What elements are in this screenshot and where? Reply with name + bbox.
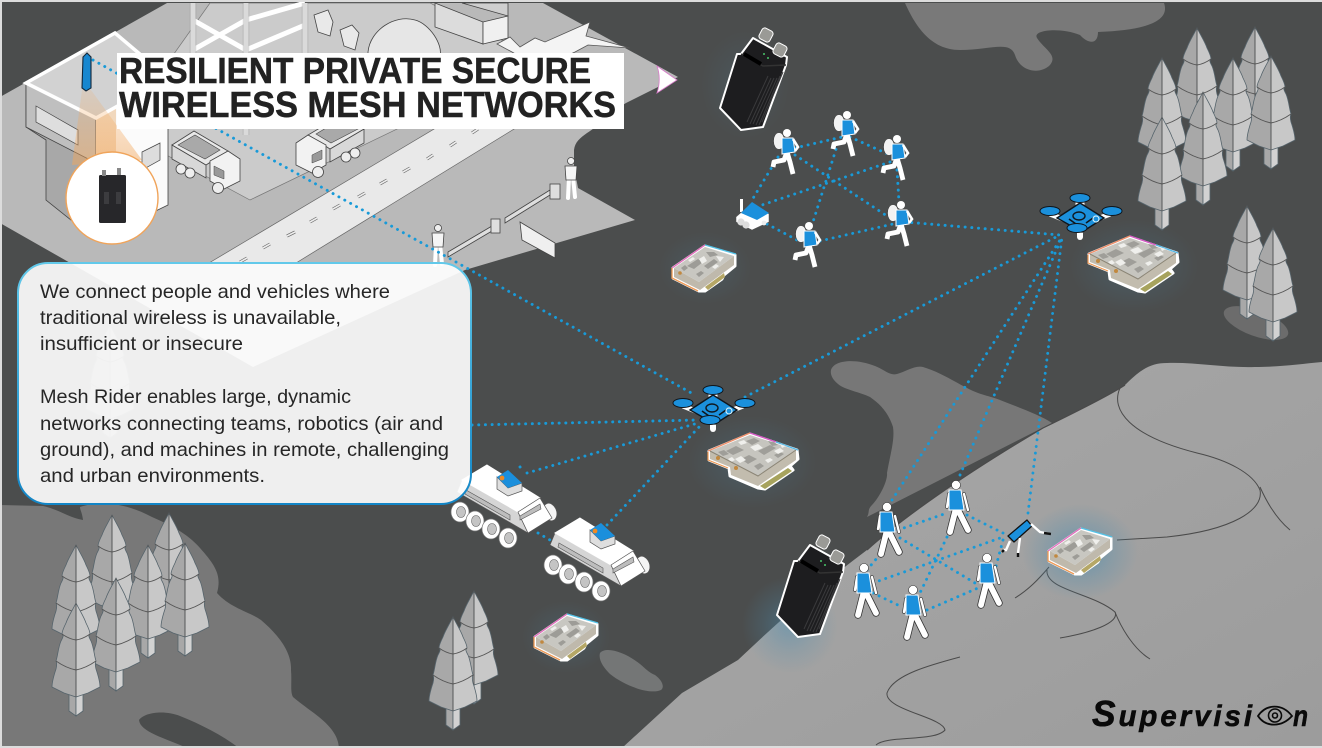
icon: small module lower	[534, 614, 598, 660]
vehicle: rear armoured rover	[451, 465, 559, 548]
icon: radio close-up circle	[66, 152, 158, 244]
site guards	[432, 158, 577, 265]
icon: rooftop antenna	[82, 53, 91, 91]
text: mesh rider description: ground), and machines in remote, challenging	[40, 439, 449, 461]
icon: ground robot	[736, 199, 769, 230]
tree group: middle pair	[429, 591, 498, 730]
parked trucks	[172, 115, 364, 194]
logo: Supervision: n	[1293, 700, 1308, 733]
tree group: right pair	[1223, 206, 1297, 341]
vehicle: front armoured rover	[544, 518, 652, 601]
mesh links: long range	[93, 60, 1062, 540]
orange signal beam	[72, 90, 142, 165]
ghost tree behind text box	[86, 325, 134, 438]
hill contour lines	[867, 385, 1290, 745]
icon: mesh module centre	[708, 433, 798, 489]
icon: drone relay centre	[673, 386, 755, 432]
small terrain patch	[600, 650, 663, 691]
panel: description text box	[18, 263, 471, 504]
tree shadow	[1220, 299, 1292, 347]
title	[117, 50, 624, 129]
white marker	[657, 66, 677, 93]
scaffold tower	[193, 3, 305, 135]
top terrain blob	[905, 3, 1165, 71]
tree group: left forest	[52, 513, 209, 716]
ground plane	[0, 3, 678, 367]
road markings	[240, 129, 478, 262]
text: problem statement: traditional wireless is unavailable,	[40, 307, 341, 329]
text: problem statement: insufficient or insecure	[40, 333, 243, 355]
office building	[26, 33, 168, 240]
ground team: walkers	[855, 480, 999, 637]
lower-left terrain	[0, 503, 339, 748]
icon: drone relay right	[1040, 194, 1122, 240]
text: problem statement: We connect people and vehicles where	[40, 281, 390, 303]
logo: Supervision: Supervisi	[1092, 693, 1255, 734]
hill terrain	[622, 362, 1322, 748]
road barrier posts	[448, 184, 560, 258]
icon: robot dog	[1002, 520, 1051, 557]
silo	[368, 19, 440, 56]
upper team: runners	[773, 111, 912, 267]
title: RESILIENT PRIVATE SECURE	[119, 50, 591, 91]
mid terrain ridge	[831, 361, 1052, 517]
text: mesh rider description: Mesh Rider enables large, dynamic	[40, 386, 351, 408]
icon: radio lower	[777, 534, 845, 637]
icon: radio upper	[720, 27, 788, 130]
text: mesh rider description	[40, 386, 449, 487]
icon: mesh module right	[1088, 236, 1178, 292]
lighter yard	[120, 3, 540, 200]
storage crates	[314, 10, 359, 50]
shipping containers	[435, 3, 508, 44]
tree group: right forest	[1138, 27, 1295, 230]
panel: industrial site	[0, 3, 678, 367]
text: mesh rider description: and urban environments.	[40, 465, 265, 487]
title: WIRELESS MESH NETWORKS	[119, 84, 616, 125]
hardware glows	[522, 31, 1198, 673]
text: mesh rider description: networks connecting teams, robotics (air and	[40, 413, 443, 435]
icon: small module upper	[672, 245, 736, 291]
icon: logo eye	[1258, 707, 1292, 725]
mesh links: ground team	[867, 513, 1003, 610]
aircraft	[497, 22, 630, 68]
icon: small module hill	[1048, 528, 1112, 574]
road	[209, 110, 545, 263]
mesh links: upper team	[752, 137, 899, 241]
text: problem statement	[40, 281, 390, 355]
